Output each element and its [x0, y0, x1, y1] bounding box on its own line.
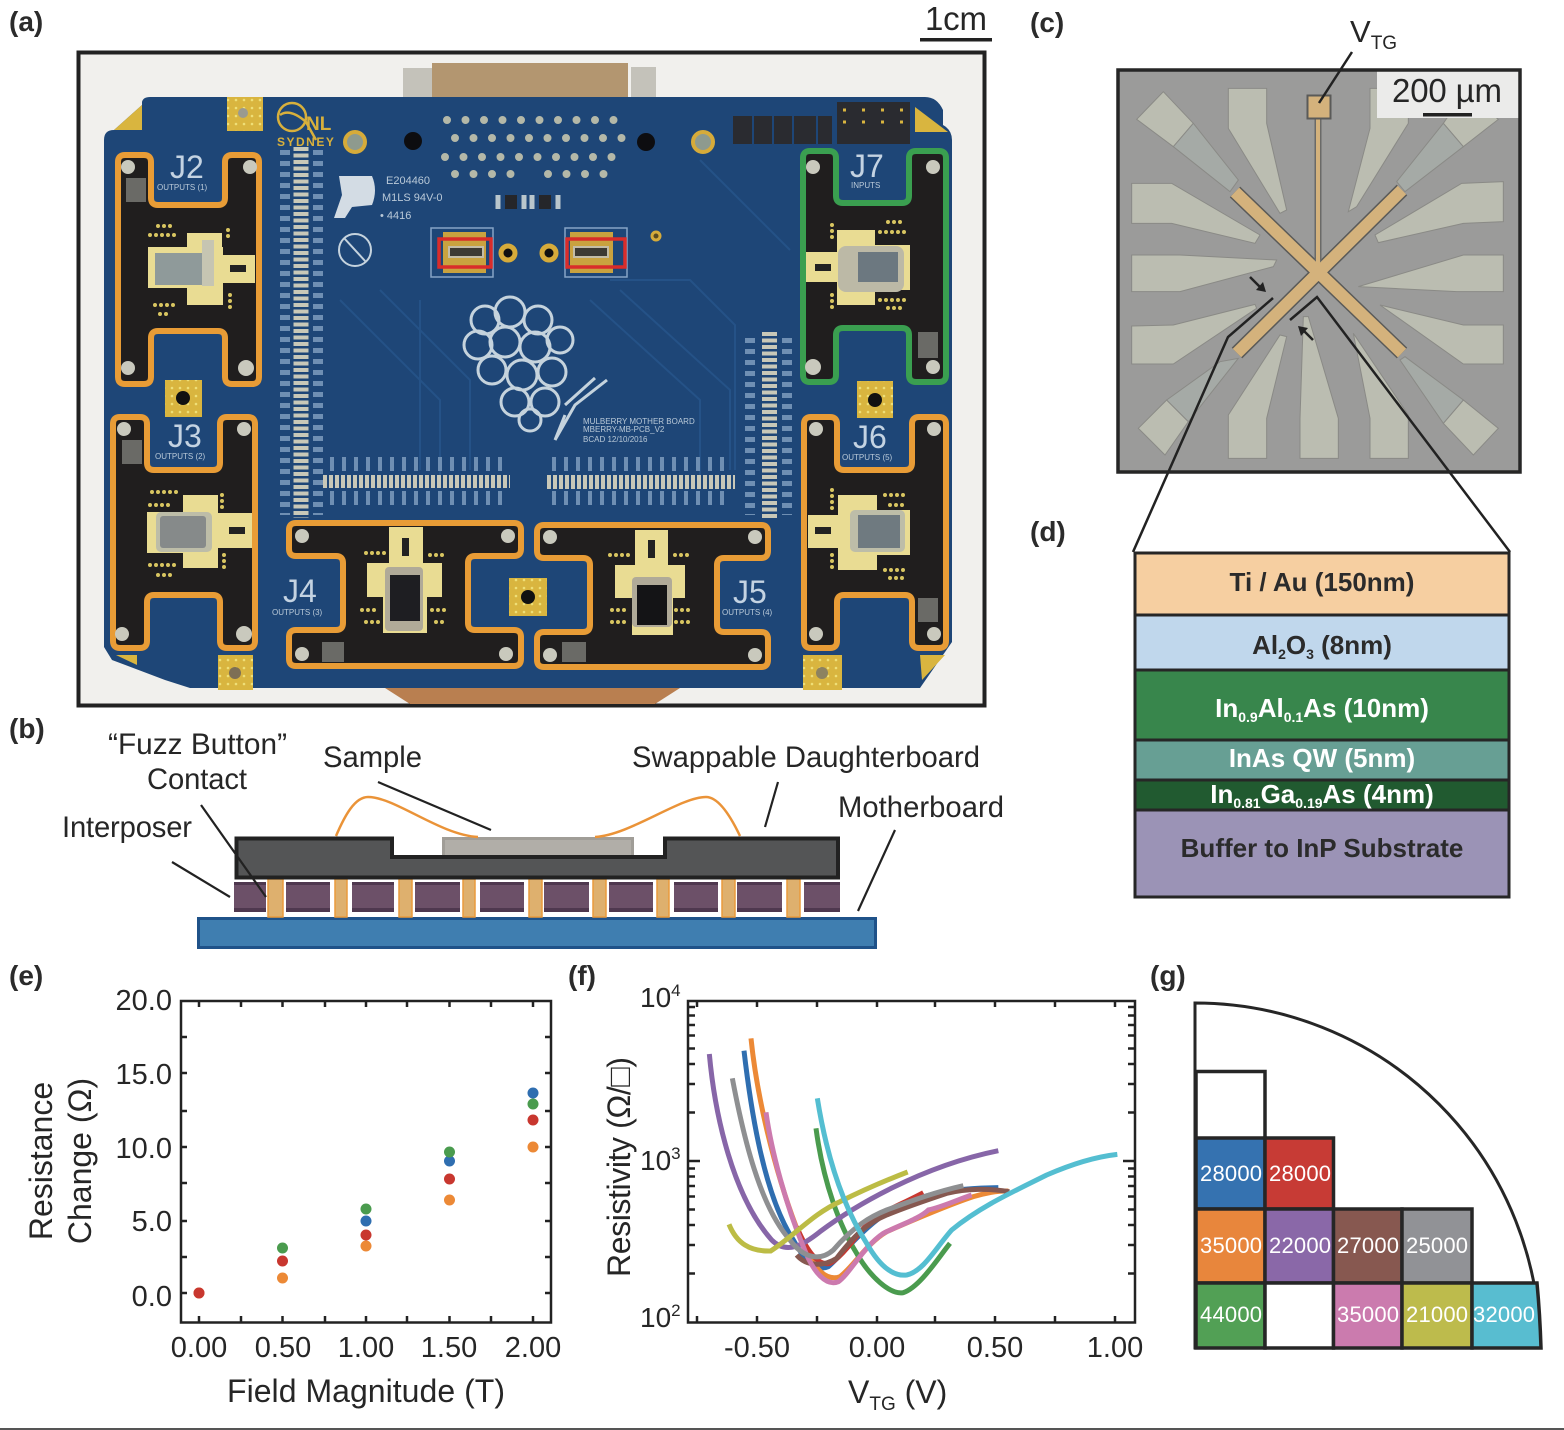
scale bar: 200 µm	[1377, 70, 1519, 118]
layer: Al2O3: 3	[1306, 646, 1314, 662]
silkscreen: connector names: OUTPUTS (3)	[272, 608, 323, 617]
wafer quarter outline	[1195, 1003, 1540, 1348]
die: 22000 purple: 22000	[1269, 1233, 1331, 1258]
chart: resistance change vs field magnitude	[23, 985, 561, 1409]
panel label (a): (a)	[9, 6, 43, 37]
daughterboard: J6	[804, 417, 946, 648]
daughterboard: J3	[113, 417, 255, 648]
panel: wafer map	[1195, 1003, 1541, 1348]
daughterboard: J2	[118, 155, 259, 384]
layer: Al2O3: Al	[1252, 630, 1278, 660]
leader lines	[172, 782, 895, 911]
gold mounting pads	[114, 97, 948, 690]
x tick labels: 1.00	[1087, 1332, 1143, 1364]
y tick labels: 15.0	[116, 1059, 172, 1091]
panel label (e): (e)	[9, 960, 43, 991]
label: QNL Sydney text	[277, 114, 335, 149]
x tick labels: 1.00	[338, 1332, 394, 1364]
die: 25000 gray: 25000	[1406, 1233, 1468, 1258]
layer: InGaAs: In	[1210, 779, 1233, 809]
y axis title: Resistance	[23, 1082, 59, 1240]
die: 22000 purple	[1265, 1209, 1334, 1283]
layer: Ti/Au	[1135, 553, 1509, 615]
layer: Ti/Au: Ti / Au (150nm)	[1230, 567, 1414, 597]
silkscreen: connector names: J3	[168, 418, 202, 454]
daughterboard: J7 highlighted in green	[803, 151, 946, 382]
top gate bond pad	[1308, 96, 1330, 118]
panel label (b): (b)	[9, 713, 45, 744]
label: QNL Sydney text: SYDNEY	[277, 135, 335, 149]
silkscreen: connector names: OUTPUTS (1)	[157, 183, 208, 192]
silkscreen: board markings	[380, 175, 695, 444]
x tick labels: 0.00	[171, 1332, 227, 1364]
capacitors C160 and C161	[498, 195, 558, 209]
die: 28000 red	[1265, 1138, 1334, 1209]
y tick labels: 10	[640, 1302, 671, 1333]
x tick labels: 0.00	[849, 1332, 905, 1364]
label: fuzz button contact: “Fuzz Button”	[108, 728, 287, 761]
layer: Al2O3: O	[1286, 630, 1306, 660]
daughterboard: J4	[289, 523, 521, 666]
die: 44000 green: 44000	[1200, 1302, 1262, 1327]
vias and holes	[345, 132, 713, 260]
die cells	[1196, 1072, 1541, 1348]
y tick labels: 0.0	[132, 1281, 172, 1313]
x tick labels	[171, 1332, 561, 1364]
y axis title	[23, 1078, 98, 1244]
x axis title: TG	[869, 1394, 896, 1415]
y tick labels: 3	[671, 1144, 681, 1163]
y tick labels: 10	[640, 982, 671, 1013]
layer: InAs quantum well: InAs QW (5nm)	[1229, 743, 1415, 773]
icon: raspberry logo	[464, 297, 607, 440]
die: 35000 orange	[1196, 1209, 1265, 1283]
silkscreen: board markings: MULBERRY MOTHER BOARD	[583, 417, 695, 426]
layer: buffer: Buffer to InP Substrate	[1181, 833, 1463, 863]
x axis title: Field Magnitude (T)	[227, 1373, 505, 1409]
y axis title: Resistivity (Ω/□)	[601, 1057, 637, 1277]
die: 27000 brown: 27000	[1337, 1233, 1399, 1258]
silkscreen: connector names: J6	[853, 419, 887, 455]
layer: InGaAs: 0.19	[1295, 795, 1323, 811]
label: sample: Sample	[323, 742, 422, 774]
die: 32000 cyan: 32000	[1473, 1302, 1535, 1327]
silkscreen: connector names: OUTPUTS (4)	[722, 608, 773, 617]
layer: Al2O3: (8nm)	[1314, 630, 1392, 660]
x tick labels: 0.50	[255, 1332, 311, 1364]
through-hole pin array	[445, 120, 630, 174]
silkscreen: connector names: J7	[850, 148, 884, 184]
silkscreen: board markings: BCAD 12/10/2016	[583, 435, 648, 444]
x tick labels	[724, 1332, 1143, 1364]
panel: layer stack	[1135, 553, 1509, 897]
interposer blocks	[234, 882, 840, 912]
resistivity curves	[709, 1038, 1117, 1293]
layer: InAlAs: Al	[1258, 693, 1284, 723]
y axis title: Change (Ω)	[62, 1078, 98, 1244]
layer: Al2O3: 2	[1278, 646, 1286, 662]
y tick labels: 4	[671, 981, 681, 1000]
motherboard layer	[198, 918, 876, 948]
silkscreen: connector names	[155, 148, 893, 617]
layer: InAlAs	[1135, 670, 1509, 740]
panel: device micrograph	[1118, 14, 1520, 552]
panel label (g): (g)	[1150, 960, 1186, 991]
die: 27000 brown	[1334, 1209, 1402, 1283]
layer: InGaAs: Ga	[1261, 779, 1296, 809]
silkscreen: board markings: MBERRY-MB-PCB_V2	[583, 425, 665, 434]
sample region and black zoom guides	[1133, 297, 1510, 552]
connector at top of board	[403, 63, 656, 98]
die: 28000 blue: 28000	[1200, 1161, 1262, 1186]
daughterboard	[236, 838, 838, 878]
axes frame and ticks	[688, 1001, 1135, 1323]
capacitor strips	[285, 147, 787, 518]
jumper headers	[733, 102, 910, 144]
y tick labels: 5.0	[132, 1206, 172, 1238]
layer: InAlAs: As (10nm)	[1303, 693, 1429, 723]
die: 25000 gray	[1402, 1209, 1472, 1283]
y tick labels: 10.0	[116, 1133, 172, 1165]
scale bar: 200 µm: 200 µm	[1392, 72, 1502, 109]
layer: InAlAs: In	[1215, 693, 1238, 723]
x axis title: (V)	[896, 1374, 947, 1410]
y tick labels	[640, 981, 681, 1333]
y tick labels: 10	[640, 1145, 671, 1176]
x axis title: V	[848, 1374, 869, 1410]
bond wires	[336, 797, 740, 837]
silkscreen: connector names: INPUTS	[851, 181, 880, 190]
leader: gate label	[1319, 52, 1352, 103]
fuzz button contacts	[268, 879, 800, 917]
die: 44000 green	[1196, 1283, 1265, 1348]
connectors U1 and U2 with red highlights	[431, 228, 627, 277]
scale bar: 1cm: 1cm	[925, 0, 987, 37]
die: 28000 red: 28000	[1269, 1161, 1331, 1186]
layer: buffer	[1135, 810, 1509, 897]
silkscreen: board markings: • 4416	[380, 210, 411, 222]
die: 32000 cyan	[1472, 1283, 1541, 1348]
die: 35000 orange: 35000	[1200, 1233, 1262, 1258]
silkscreen: connector names: J4	[283, 573, 317, 609]
label: fuzz button contact	[108, 728, 287, 796]
silkscreen: connector names: OUTPUTS (2)	[155, 452, 206, 461]
icon: no-symbol mark	[339, 234, 371, 266]
label: QNL Sydney text: NL	[306, 114, 332, 135]
x tick labels: 0.50	[967, 1332, 1023, 1364]
die: 35000 pink	[1334, 1283, 1402, 1348]
frame	[1118, 70, 1520, 472]
die: 21000 olive: 21000	[1406, 1302, 1468, 1327]
label: swappable daughterboard: Swappable Daughterboard	[632, 742, 980, 774]
panel: stack cross-section schematic	[62, 728, 1004, 948]
label: interposer: Interposer	[62, 812, 192, 844]
panel label (d): (d)	[1030, 516, 1066, 547]
y tick labels: 2	[671, 1301, 681, 1320]
silkscreen: board markings: E204460	[386, 175, 430, 187]
layer: InAlAs: 0.9	[1238, 709, 1258, 725]
silkscreen: connector names: OUTPUTS (5)	[842, 453, 893, 462]
x tick labels: 1.50	[421, 1332, 477, 1364]
motherboard	[104, 97, 952, 688]
layer: InGaAs: As (4nm)	[1323, 779, 1434, 809]
die: 21000 olive	[1402, 1283, 1472, 1348]
silkscreen: connector names: J5	[733, 574, 767, 610]
layer: InGaAs	[1135, 779, 1509, 811]
label: fuzz button contact: Contact	[147, 764, 247, 796]
logo: manufacturer P mark	[334, 176, 375, 218]
label: motherboard: Motherboard	[838, 792, 1004, 824]
chart: resistivity vs gate voltage	[601, 981, 1143, 1415]
y tick labels	[116, 985, 172, 1313]
page bottom rule	[0, 1428, 1564, 1430]
axes frame and ticks	[181, 1001, 551, 1323]
y tick labels: 20.0	[116, 985, 172, 1017]
top gate cross	[1235, 119, 1402, 353]
layer: InAlAs: 0.1	[1284, 709, 1303, 725]
die: 35000 pink: 35000	[1337, 1302, 1399, 1327]
label: V TG: TG	[1371, 33, 1397, 54]
panel label (c): (c)	[1030, 7, 1064, 38]
data points	[194, 1088, 538, 1298]
sample chip	[444, 838, 632, 856]
contact pads	[1132, 88, 1503, 458]
logo: QNL Sydney	[278, 103, 316, 140]
silkscreen: board markings: M1LS 94V-0	[382, 192, 443, 204]
x tick labels: 2.00	[505, 1332, 561, 1364]
silkscreen: connector names: J2	[170, 149, 204, 185]
daughterboard: J5	[537, 525, 768, 667]
panel: circuit board photo	[78, 52, 984, 706]
x tick labels: -0.50	[724, 1332, 790, 1364]
layer: Al2O3	[1135, 615, 1509, 670]
layer: InAs quantum well	[1135, 740, 1509, 780]
copper base under board	[385, 688, 680, 704]
die: 28000 blue	[1196, 1138, 1265, 1209]
label: V TG: V	[1350, 14, 1371, 49]
board traces	[340, 160, 790, 480]
panel label (f): (f)	[568, 960, 596, 991]
arrows	[1250, 277, 1313, 340]
layer: InGaAs: 0.81	[1233, 795, 1261, 811]
